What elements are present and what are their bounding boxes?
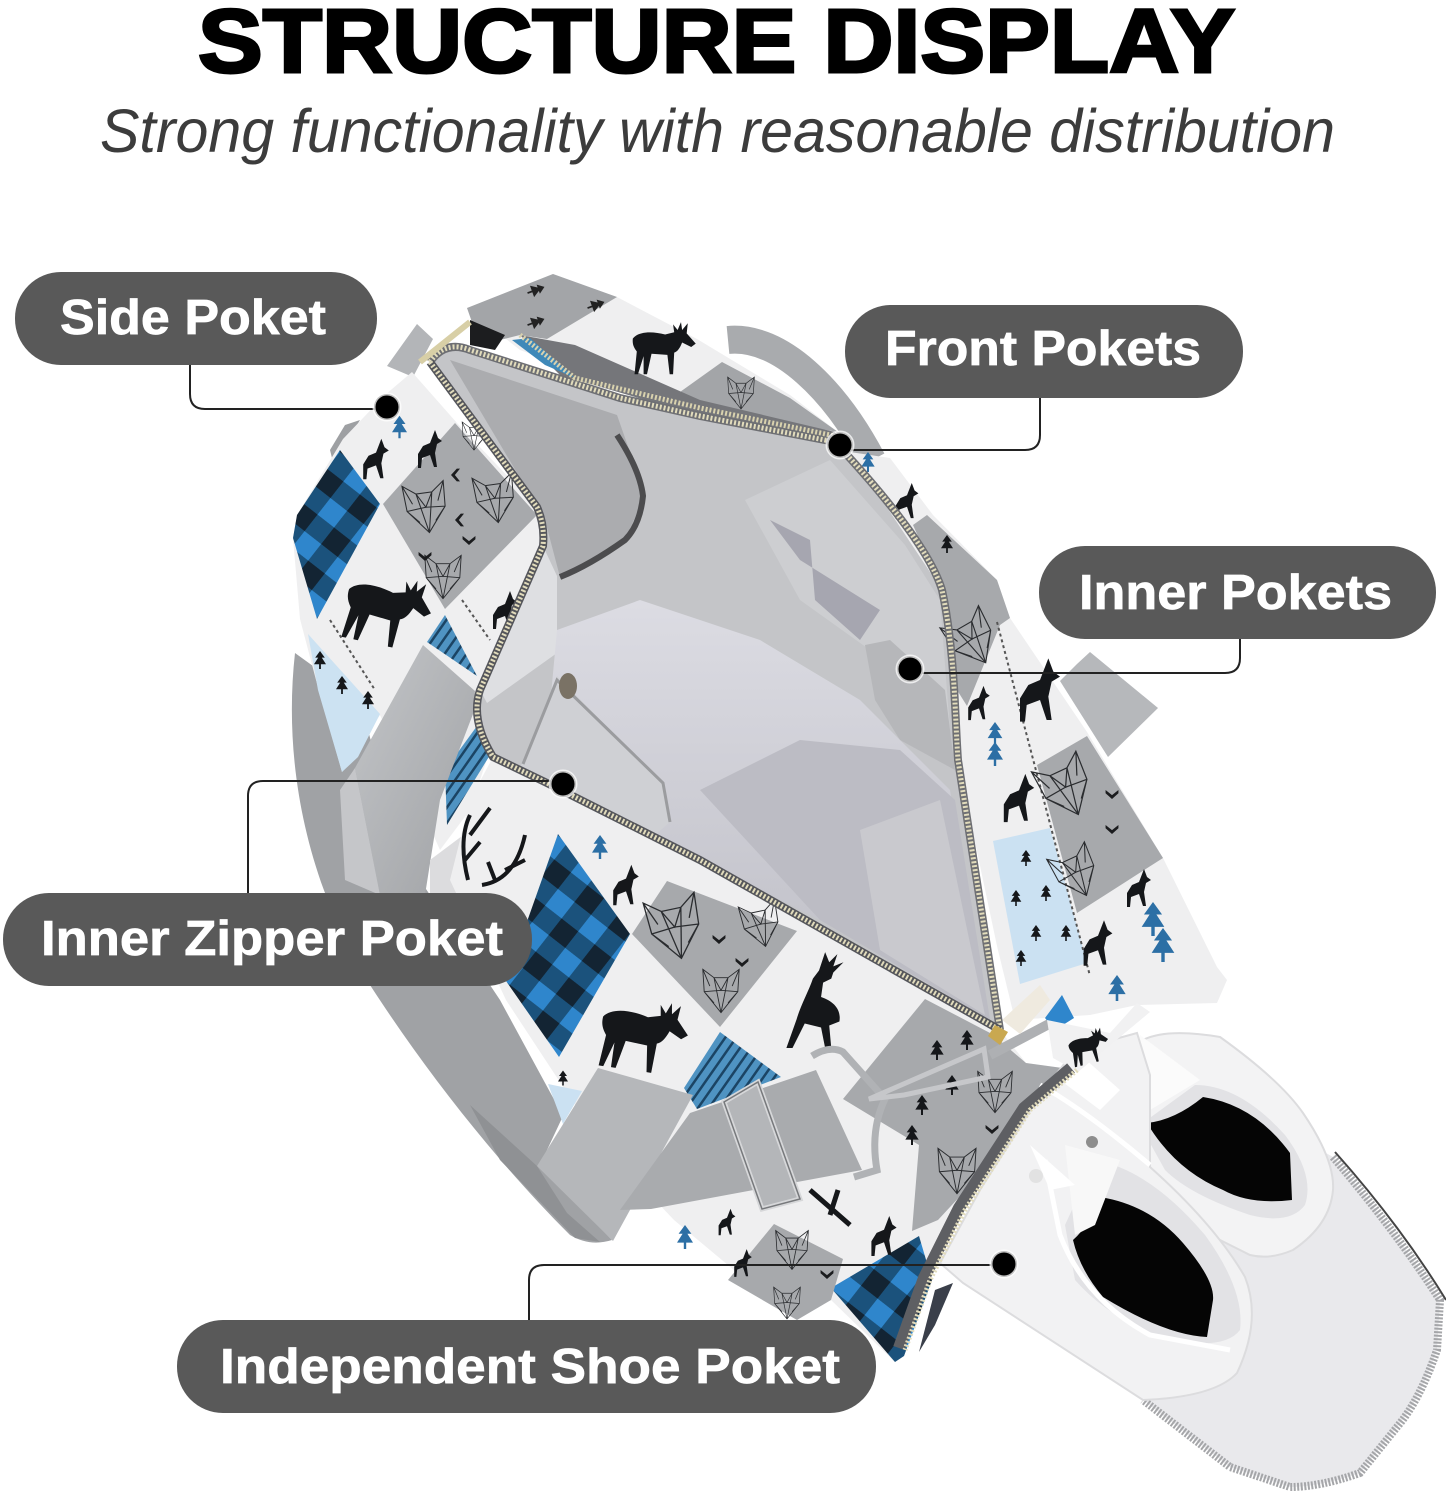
callout: inner pockets bbox=[897, 546, 1436, 682]
white strap end over the shoes bbox=[1047, 1003, 1150, 1072]
shoes bbox=[940, 1033, 1333, 1400]
callout: inner pockets: Inner Pokets bbox=[1079, 566, 1392, 620]
left patchwork panel bbox=[293, 372, 545, 850]
main lavender lining bbox=[545, 600, 990, 1020]
inner zipper pocket bbox=[520, 676, 670, 835]
zippers bbox=[420, 322, 1077, 1352]
right inner pocket bbox=[745, 460, 950, 730]
callout: independent shoe pocket: Independent Shoe Poket bbox=[220, 1340, 840, 1394]
side flap bbox=[480, 546, 557, 703]
callout: inner zipper pocket: Inner Zipper Poket bbox=[41, 912, 503, 966]
bottom patchwork panel bbox=[450, 757, 1077, 1362]
upper shoe bbox=[1120, 1033, 1333, 1257]
metal clasp bbox=[812, 985, 1074, 1177]
subtitle: Strong functionality with reasonable distribution bbox=[100, 97, 1335, 165]
lower shoe bbox=[940, 1033, 1252, 1400]
front strap bbox=[340, 645, 520, 900]
antlers bbox=[463, 808, 525, 885]
strap adjuster buckle bbox=[724, 1082, 800, 1209]
callout: side pocket: Side Poket bbox=[60, 291, 326, 345]
inner lining bbox=[430, 347, 1000, 1030]
callout: inner zipper pocket bbox=[3, 771, 576, 986]
callout: independent shoe pocket bbox=[177, 1251, 1017, 1413]
back shoulder strap bbox=[292, 653, 612, 1243]
shoulder strap over the bag bbox=[537, 1068, 862, 1241]
shoe compartment lining bbox=[1143, 1060, 1446, 1487]
callout: front pockets bbox=[827, 305, 1243, 458]
callout: front pockets: Front Pokets bbox=[885, 322, 1201, 376]
carry handles bbox=[330, 324, 1158, 757]
bag illustration bbox=[292, 274, 1446, 1487]
callout: side pocket bbox=[15, 272, 400, 420]
right patchwork strip bbox=[850, 452, 1227, 1020]
top patchwork edge bbox=[467, 274, 838, 440]
upper cavity bbox=[450, 360, 645, 577]
